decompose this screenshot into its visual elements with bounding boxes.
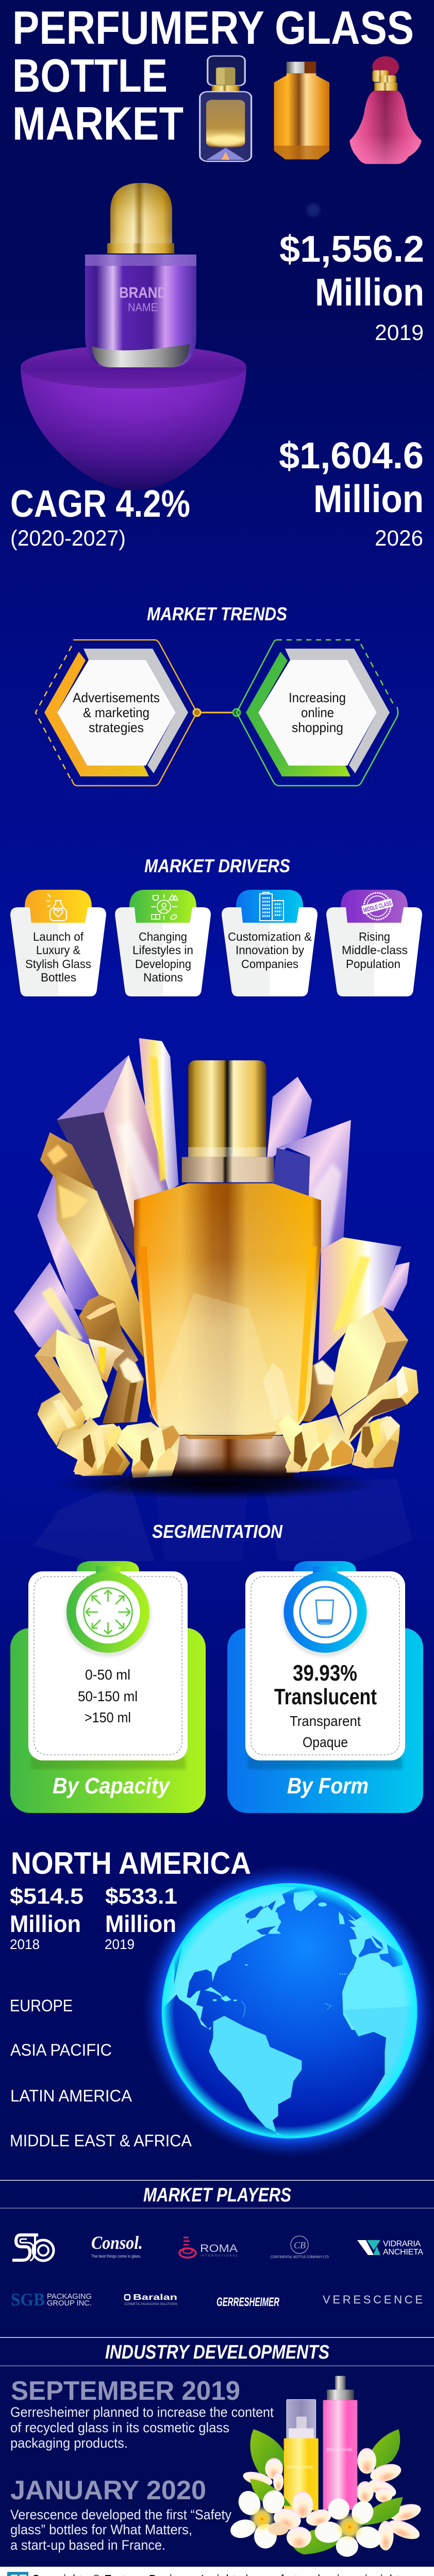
illustration: purple bottle on hemisphere [21,183,246,490]
icon: faint bubble [307,204,320,217]
stat: north america 2019: Million [105,1910,176,1937]
logo: ROMA [179,2238,238,2258]
panel: by form [227,1561,423,1813]
title [12,2,414,150]
panel: driver 3 customization: Innovation by [236,943,304,957]
bottle body: NAME [128,301,158,314]
bottle base and crystal clusters [57,1363,400,1479]
panel: by capacity: 50-150 ml [78,1688,138,1704]
crystals: lower side group [35,1295,419,1446]
logo: Vidraria Anchieta [357,2240,423,2257]
illustration: globe [142,1863,434,2158]
icon: clear glass bottle [200,56,252,161]
panel: driver 1 luxury bottles: Bottles [41,971,76,984]
text block: january 2020: a start-up based in France. [10,2537,165,2553]
panel: driver 2 lifestyles [115,890,211,996]
panel: market trends hexagons [36,640,398,786]
panel: driver 3 customization: Customization & [228,930,312,943]
text block: january 2020: glass” bottles for What Matters, [10,2522,192,2537]
heading: industry developments: INDUSTRY DEVELOPMENTS [105,2342,329,2363]
leaves back [250,2429,400,2477]
panel: by form: Transparent [290,1713,361,1729]
list: other regions [10,1996,192,2150]
stat: north america 2018: 2018 [10,1937,40,1952]
stat: 2026 value: $1,604.6 [279,435,424,477]
list: other regions: EUROPE [10,1996,73,2015]
hexagon: online shopping: shopping [292,720,343,735]
illustration: amber bottle with crystals [14,1038,419,1479]
text block: january 2020: Verescence developed the first “Safety [10,2507,231,2522]
hexagon: advertisements: strategies [89,720,144,735]
text block: september 2019: of recycled glass in its cosmetic glass [10,2420,229,2435]
panel: driver 1 luxury bottles: Stylish Glass [25,957,91,971]
stat: north america 2019: $533.1 [105,1884,177,1909]
panel: driver 1 luxury bottles [10,890,106,996]
logo: SGB Packaging: SGB [11,2290,45,2310]
logo: Consol: The best things come in glass. [91,2254,141,2259]
title: MARKET [12,98,183,150]
icon: medal with glass [282,1566,369,1657]
logo: Fortune Business Insights [7,2572,28,2576]
stat: north america 2018 [10,1884,84,1952]
text block: september 2019: packaging products. [10,2435,128,2451]
logo: Baralan [124,2293,177,2306]
heading: market trends: MARKET TRENDS [147,603,287,624]
icon: office buildings [260,892,283,921]
icon: person with lifestyle items [151,894,178,921]
hexagon: online shopping [237,640,398,786]
panel: driver 2 lifestyles: Changing [139,930,187,943]
panel: by capacity: By Capacity [53,1773,171,1799]
icon: medal with arrows [65,1566,152,1657]
bottle body [85,255,196,367]
stat: 2019 value: Million [315,270,424,314]
panel: driver 2 lifestyles: Lifestyles in [132,943,193,957]
hexagon: online shopping: Increasing [289,690,346,705]
logo: ROMA: ROMA [200,2243,238,2255]
list: other regions: ASIA PACIFIC [10,2041,112,2059]
logo: ROMA: INTERNATIONAL [200,2255,238,2258]
stat: 2019 value: 2019 [375,320,424,345]
panel: driver 3 customization [222,890,318,996]
panel: market players logos [11,2232,423,2310]
hexagon: advertisements: Advertisements [73,690,160,705]
panel: by capacity [10,1561,206,1813]
heading: market drivers: MARKET DRIVERS [144,855,290,876]
logo: Continental Bottle Company [271,2236,329,2259]
pink flowers back [242,2448,403,2502]
logo: Vidraria Anchieta: ANCHIETA [383,2248,423,2257]
leaves front [250,2479,344,2554]
stat: 2019 value [279,229,424,345]
logo: SGB Packaging [11,2290,92,2310]
hexagon: advertisements [36,640,197,786]
text block: january 2020 [10,2476,231,2553]
icon: bottle with heart [46,894,66,921]
panel: driver 1 luxury bottles: Luxury & [36,943,80,957]
logo: STO [12,2235,54,2261]
text block: january 2020: JANUARY 2020 [10,2476,206,2505]
icon: middle class stamp: MIDDLE CLASS [362,900,392,914]
hemisphere [21,345,246,490]
panel: by form: Translucent [274,1684,377,1709]
stat: north america 2019 [105,1884,177,1952]
bottles [284,2376,357,2511]
white flowers [228,2487,385,2557]
logo: SGB Packaging: GROUP INC. [47,2299,92,2308]
panel: driver 3 customization: Companies [241,957,298,971]
text block: september 2019 [10,2376,274,2451]
bottle cap [107,183,174,253]
text block: september 2019: Gerresheimer planned to increase the content [10,2404,274,2420]
stat: CAGR: (2020-2027) [10,526,126,551]
crystal reflection [34,1479,412,1561]
icon: pink bottle [349,56,422,164]
logo: Vidraria Anchieta: VIDRARIA [383,2240,421,2248]
heading: north america: NORTH AMERICA [11,1846,251,1880]
logo: Consol: Consol. [91,2232,143,2253]
icon: amber bottle [274,62,329,159]
pink flowers front [271,2492,423,2550]
bottles: BRAND NAME [287,2465,313,2470]
logo: Continental Bottle Company: CONTINENTAL BOTTLE COMPANY LTD [271,2256,329,2259]
bottle amber [134,1060,321,1435]
logo: Baralan: COSMETIC PACKAGING SOLUTIONS [124,2303,177,2306]
panel: by capacity: >150 ml [85,1709,131,1725]
stat: 2019 value: $1,556.2 [279,229,424,270]
bottles: BRAND NAME [326,2447,353,2452]
stat: CAGR: CAGR 4.2% [10,482,190,525]
list: other regions: LATIN AMERICA [10,2087,132,2105]
hexagon: online shopping: online [301,705,334,720]
logo: Gerresheimer: GERRESHEIMER [216,2295,279,2309]
logo: Verescence: VERESCENCE [323,2293,423,2306]
stat: CAGR [10,482,190,551]
stat: north america 2018: $514.5 [10,1884,84,1909]
stat: north america 2018: Million [10,1910,81,1937]
panel: by form: Opaque [303,1734,348,1750]
connector [193,709,240,716]
text block: september 2019: SEPTEMBER 2019 [11,2376,240,2406]
footer [0,2567,434,2576]
bottle body: BRAND [119,284,167,301]
stat: 2026 value [279,435,424,551]
panel: by capacity: 0-50 ml [85,1667,130,1683]
panel: by form: By Form [287,1773,369,1799]
crystals: back gold group [40,1132,144,1358]
panel: driver 4 middle class: Middle-class [342,943,408,957]
logo: Continental Bottle Company: CB [294,2240,306,2250]
heading: segmentation: SEGMENTATION [152,1521,283,1542]
panel: by form: 39.93% [293,1660,357,1686]
panel: driver 4 middle class: Rising [359,930,390,943]
list: other regions: MIDDLE EAST & AFRICA [10,2131,192,2150]
illustration: three small perfume bottles [200,56,422,164]
shadow under bottle [52,1468,381,1499]
stat: 2026 value: 2026 [375,526,423,551]
panel: driver 1 luxury bottles: Launch of [33,930,84,943]
logo: Baralan: Baralan [133,2293,177,2302]
globe continents [158,1886,430,2137]
stat: 2026 value: Million [313,477,424,520]
panel: driver 2 lifestyles: Developing [135,957,191,971]
stat: north america 2019: 2019 [105,1937,135,1952]
panel: driver 4 middle class [326,890,422,996]
heading: market players: MARKET PLAYERS [143,2184,291,2206]
panel: driver 2 lifestyles: Nations [143,971,183,984]
panel: driver 4 middle class: Population [346,957,400,971]
crystals: back purple group [14,1038,410,1361]
icon: middle class stamp [361,893,393,920]
hexagon: advertisements: & marketing [83,705,149,720]
logo: SGB Packaging: PACKAGING [47,2293,92,2301]
illustration: cosmetic bottles and flowers [228,2376,423,2557]
title: BOTTLE [12,50,168,102]
